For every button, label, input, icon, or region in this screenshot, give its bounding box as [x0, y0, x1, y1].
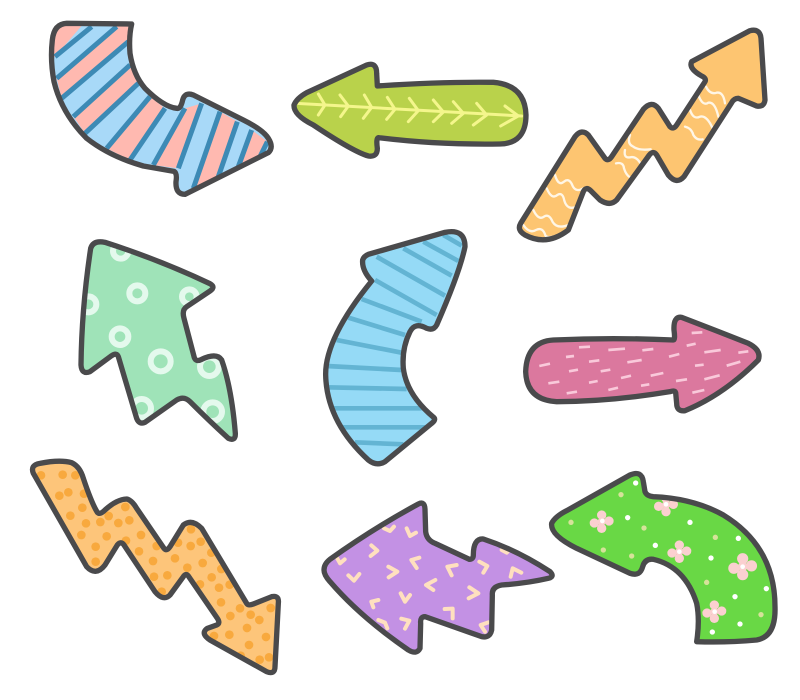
- arrow: purple arrow with cream chevrons: [324, 503, 552, 652]
- arrow: pink and blue striped curved arrow: [43, 20, 271, 194]
- arrow: orange rising zigzag arrow: [519, 30, 765, 240]
- arrow: orange falling zigzag arrow with dots: [32, 461, 278, 673]
- arrow: sky blue curved striped arrow: [326, 232, 465, 464]
- arrow: mint green arrow with rings: [80, 242, 235, 439]
- arrow: green curved arrow with flowers: [552, 473, 775, 642]
- arrow: rose pink dashed arrow: [526, 317, 759, 411]
- arrow: lime green arrow with feather line: [294, 64, 526, 156]
